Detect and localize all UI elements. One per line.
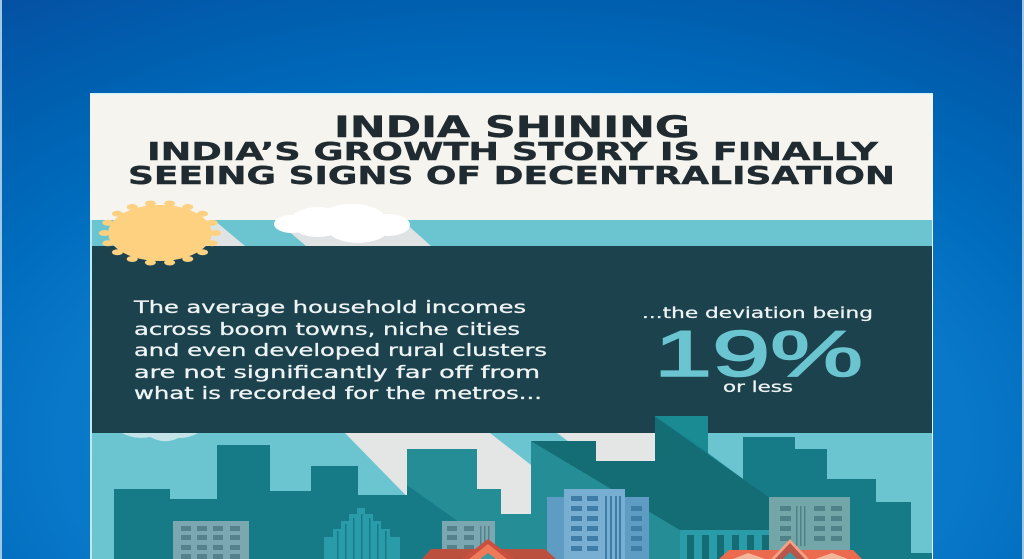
building: stepped tower [324, 508, 400, 559]
skyline lit facets [407, 416, 743, 559]
building: blue [547, 489, 649, 559]
building: grey right [769, 497, 850, 559]
sun [99, 200, 221, 266]
body text: and even developed rural clusters [134, 341, 547, 361]
deviation stat: 19% [654, 317, 863, 390]
building: grey left [173, 521, 249, 559]
sun and cloud shadows [190, 220, 431, 246]
deviation stat: or less [723, 378, 793, 396]
dark text panel [92, 246, 932, 433]
deviation stat [642, 304, 873, 396]
body text [133, 298, 547, 404]
body text: across boom towns, niche cities [134, 320, 520, 340]
skyline shadow band [531, 417, 770, 530]
building: grey centre [442, 521, 495, 559]
city skyline [114, 416, 932, 559]
body text: The average household incomes [133, 298, 526, 318]
lower sky [92, 433, 932, 559]
title: INDIA’S GROWTH STORY IS FINALLY [147, 137, 879, 166]
building: low teal [680, 530, 770, 559]
cloud [274, 204, 410, 243]
house: left [422, 539, 556, 559]
sky band [92, 220, 932, 246]
body text: are not significantly far off from [134, 363, 540, 383]
small cloud [122, 433, 198, 441]
title: INDIA SHINING [334, 110, 690, 144]
body text: what is recorded for the metros... [134, 384, 542, 404]
deviation stat: ...the deviation being [642, 304, 873, 322]
building shadows on sky [345, 433, 655, 520]
title: SEEING SIGNS OF DECENTRALISATION [128, 161, 895, 190]
infographic card [90, 93, 933, 559]
house: right [719, 539, 862, 559]
title [128, 110, 895, 190]
